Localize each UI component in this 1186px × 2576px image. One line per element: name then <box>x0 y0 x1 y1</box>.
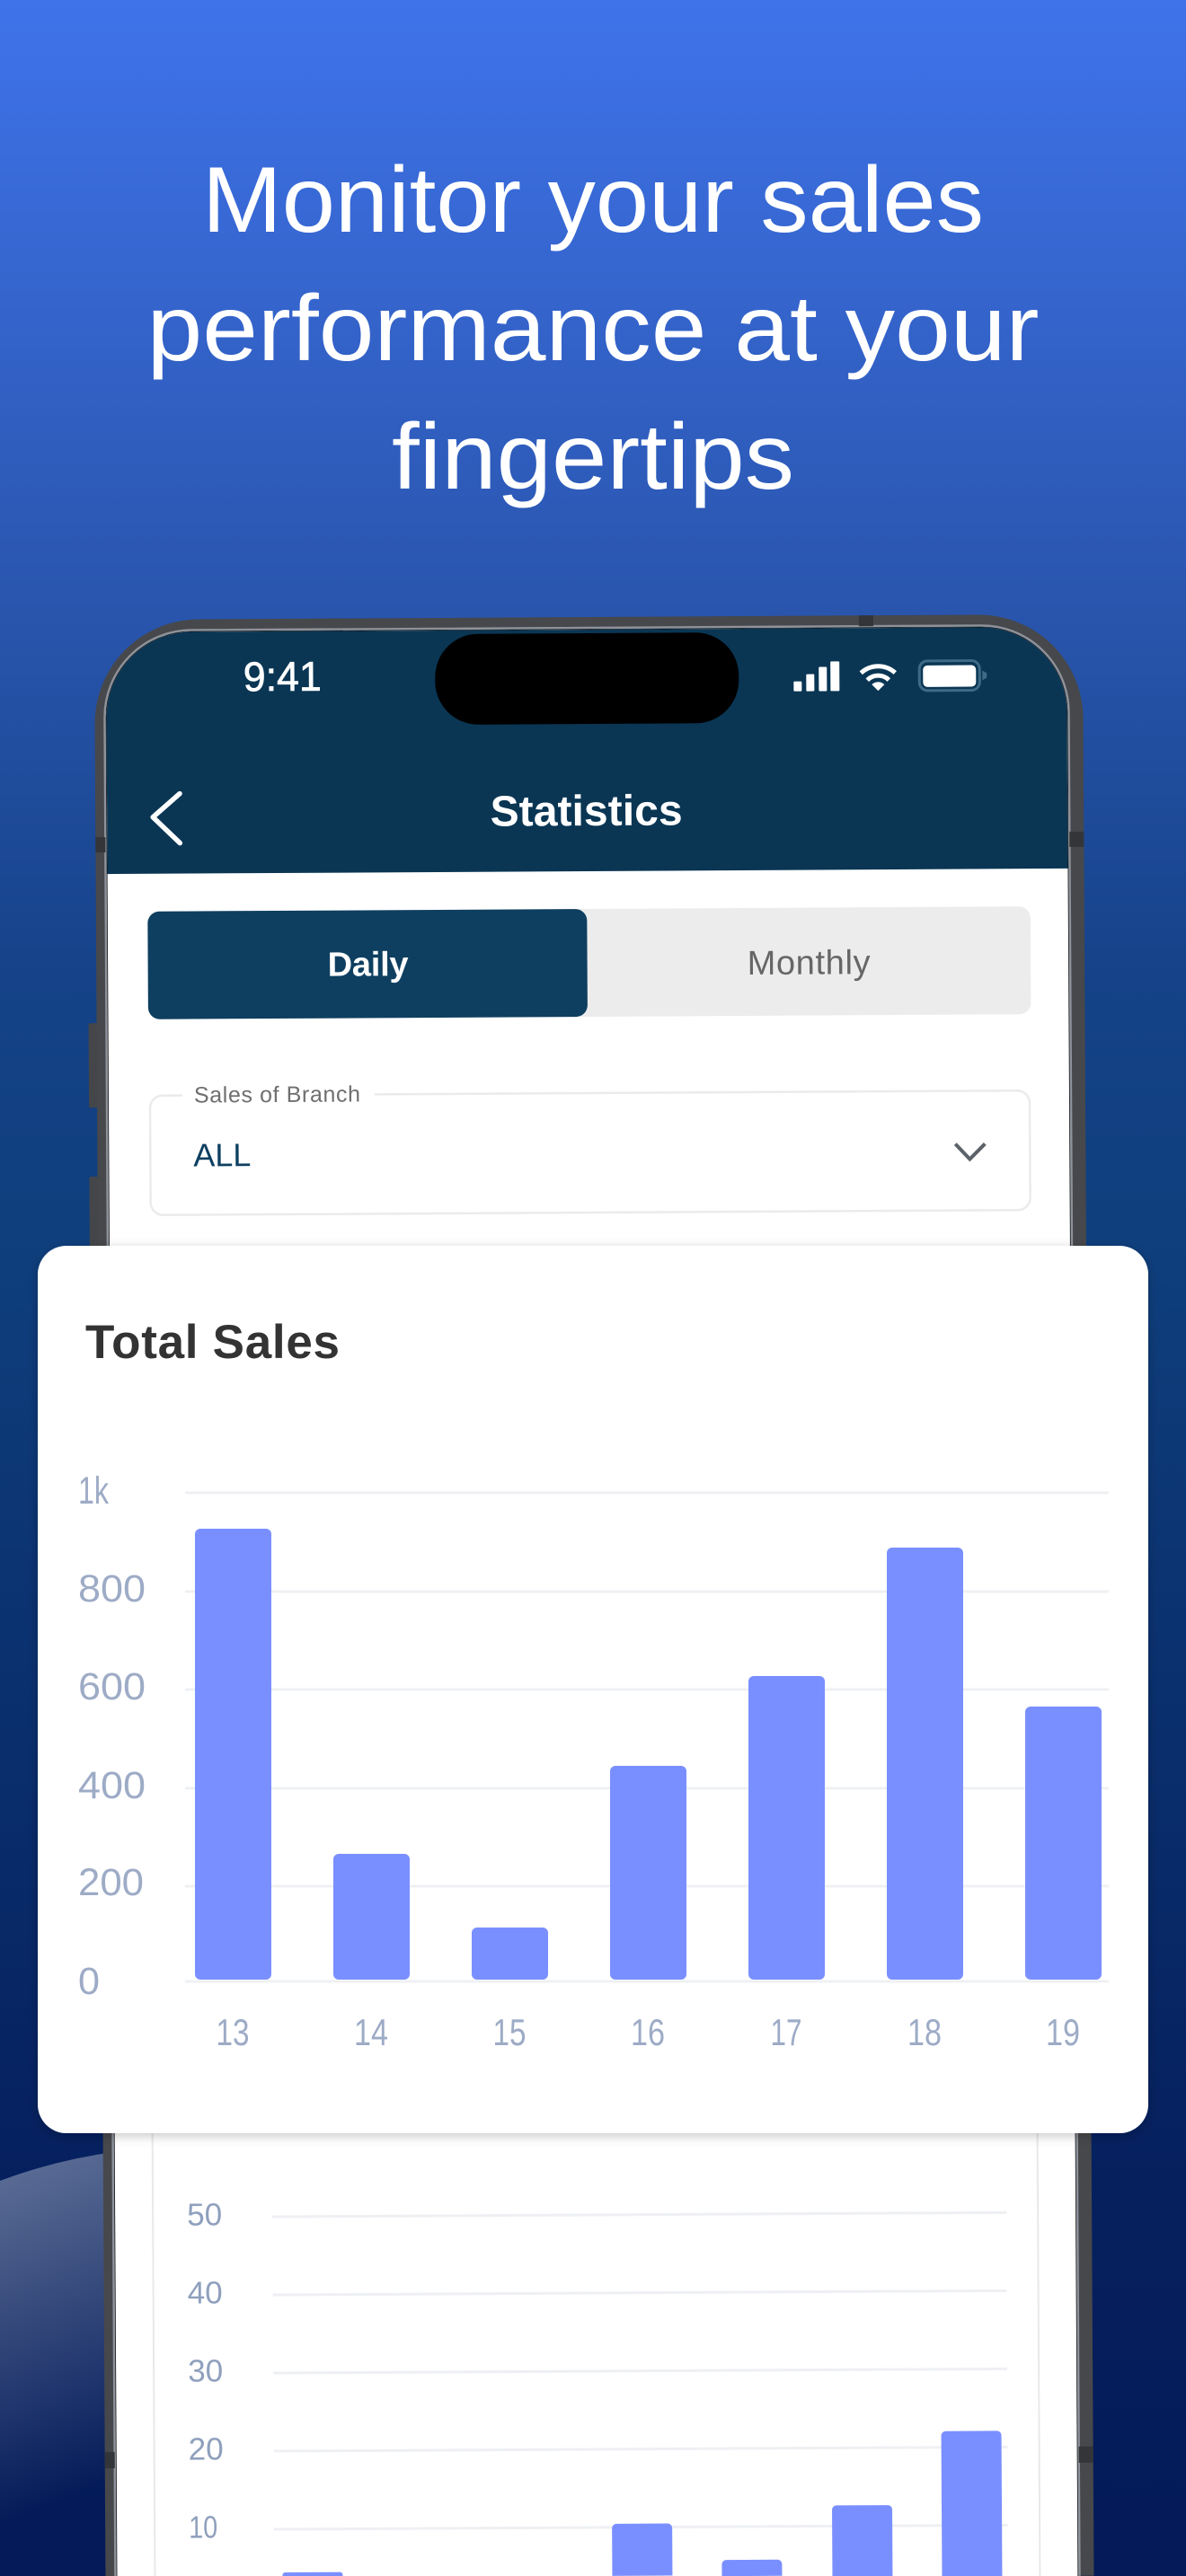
chart x axis labels: 18 <box>907 2011 942 2053</box>
branch dropdown <box>150 1078 1031 1215</box>
chart x axis labels: 19 <box>1046 2011 1080 2053</box>
chart y axis labels <box>78 1469 146 2003</box>
branch dropdown: ALL <box>193 1136 251 1174</box>
icon: signal <box>793 661 839 692</box>
lower chart y axis <box>187 2197 224 2545</box>
decorative circle lower left <box>0 2147 270 2576</box>
screen heading: Statistics <box>490 787 683 836</box>
card heading: Total Sales <box>85 1316 340 1369</box>
phone screen <box>106 627 1077 2576</box>
lower chart gridlines <box>272 2212 1008 2529</box>
title: fingertips <box>392 405 794 509</box>
chart y axis labels: 600 <box>78 1665 146 1708</box>
side buttons <box>88 1023 99 1284</box>
lower chart y axis: 10 <box>189 2510 217 2545</box>
chart x axis labels: 13 <box>216 2011 250 2053</box>
period toggle <box>147 906 1031 1019</box>
lower chart y axis: 40 <box>188 2275 223 2311</box>
dynamic island <box>435 632 739 725</box>
title: Monitor your sales <box>202 148 984 252</box>
icon: back chevron <box>153 794 180 843</box>
toggle: daily active <box>147 909 588 1019</box>
chart y axis labels: 0 <box>78 1960 100 2003</box>
status bar time: 9:41 <box>243 653 322 700</box>
phone frame <box>94 614 1093 2576</box>
chart y axis labels: 400 <box>78 1764 146 1807</box>
title <box>147 148 1039 509</box>
chart x axis labels: 17 <box>771 2011 801 2053</box>
lower chart bars <box>282 2430 1002 2576</box>
chart y axis labels: 200 <box>78 1861 144 1904</box>
toggle: daily active: Daily <box>328 946 409 984</box>
chart x axis labels: 16 <box>631 2011 665 2053</box>
icon: battery <box>919 660 987 691</box>
chart x axis labels: 15 <box>492 2011 527 2053</box>
branch dropdown: Sales of Branch <box>194 1081 360 1108</box>
toggle: monthly: Monthly <box>747 944 871 983</box>
chart y axis labels: 800 <box>78 1567 146 1610</box>
chart bars <box>195 1529 1102 1980</box>
lower chart panel <box>152 2063 1040 2576</box>
app header bar <box>106 627 1068 874</box>
title: performance at your <box>147 277 1039 381</box>
chart x axis labels <box>216 2011 1080 2053</box>
phone mockup <box>86 614 1093 2576</box>
chart y axis labels: 1k <box>78 1469 109 1513</box>
icon: wifi <box>861 666 895 691</box>
total sales card <box>38 1246 1148 2133</box>
chart x axis labels: 14 <box>354 2011 388 2053</box>
lower chart y axis: 30 <box>188 2353 223 2389</box>
lower chart y axis: 20 <box>189 2431 224 2467</box>
chart gridlines <box>185 1493 1109 1981</box>
lower chart y axis: 50 <box>187 2197 222 2233</box>
